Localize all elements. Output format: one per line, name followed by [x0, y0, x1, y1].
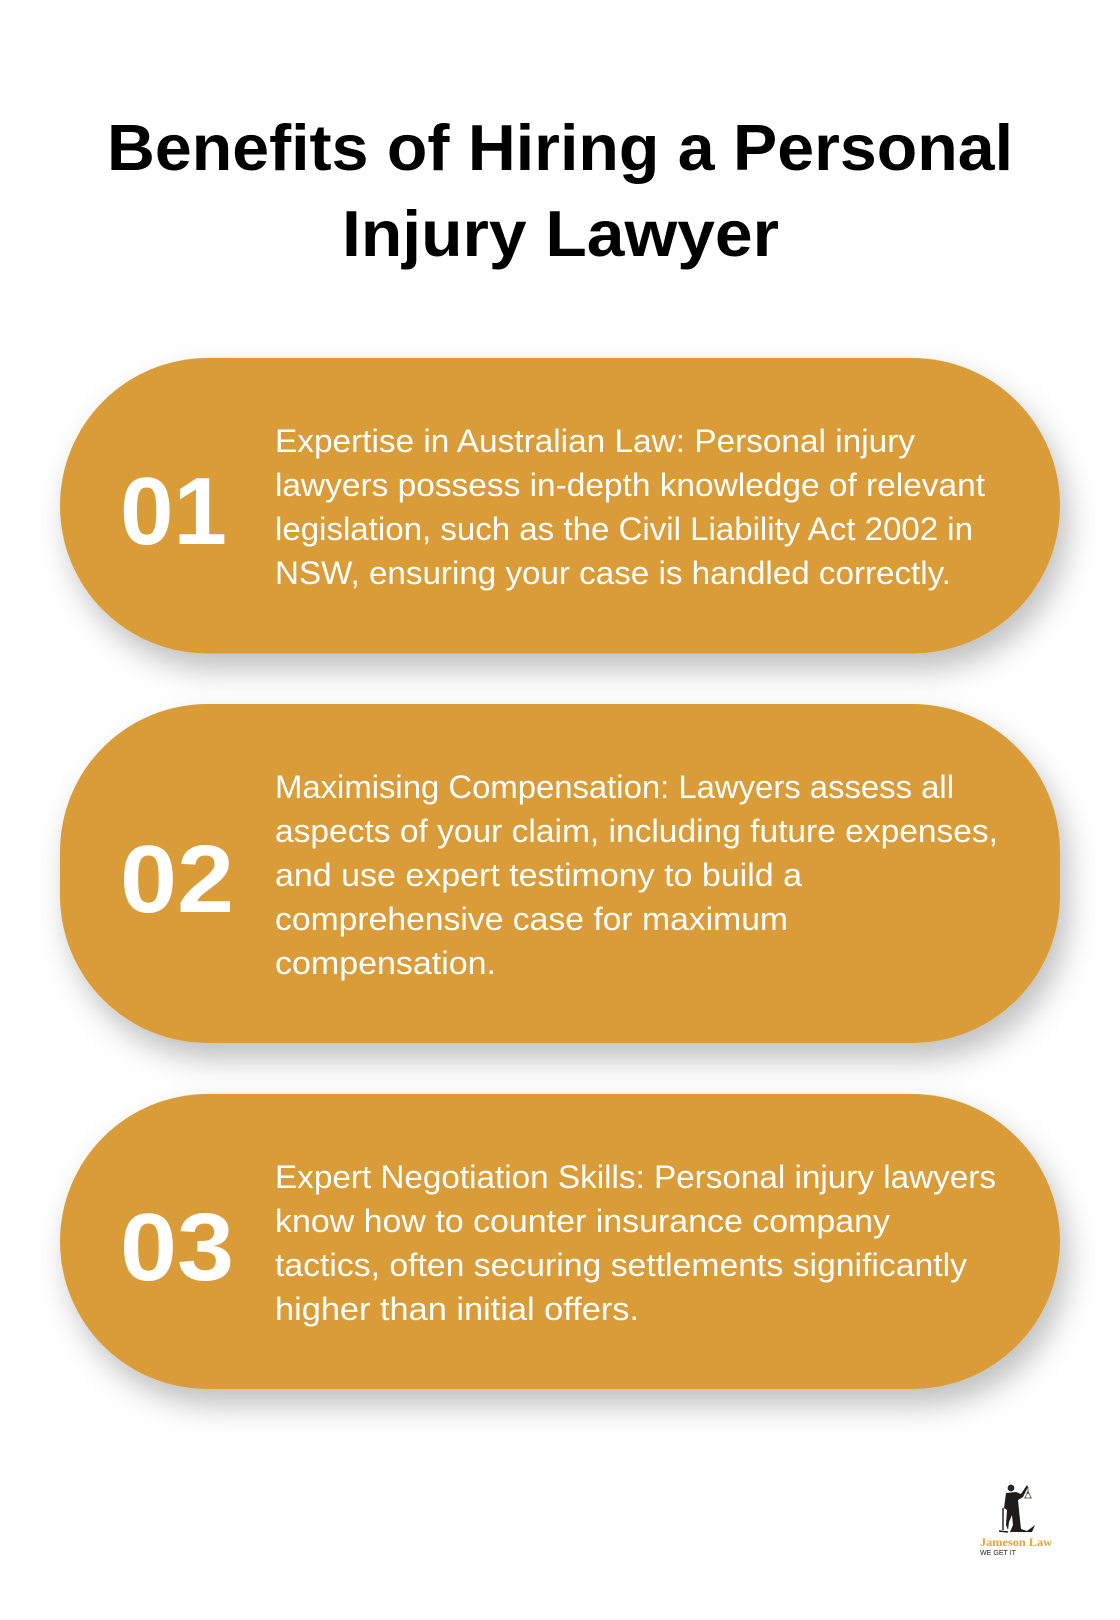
text: expert negotiation skills: Expert Negotiation Skills: Personal injury lawyers	[275, 1159, 996, 1195]
icon: lady justice figure	[999, 1485, 1035, 1532]
text: expert negotiation skills: tactics, often securing settlements significantly	[275, 1247, 968, 1283]
text: maximising compensation	[275, 769, 998, 981]
panel: benefit 01	[60, 358, 1060, 654]
panel background pill 03	[60, 1094, 1060, 1389]
text: expertise in Australian law	[275, 423, 985, 591]
text: maximising compensation: compensation.	[275, 945, 496, 981]
panel: benefit 03	[60, 1094, 1060, 1389]
text: expert negotiation skills: higher than initial offers.	[275, 1291, 639, 1327]
panel background pill 02	[60, 704, 1060, 1043]
logo name: Jameson Law	[980, 1537, 1053, 1549]
text: maximising compensation: comprehensive case for maximum	[275, 901, 788, 937]
text: expertise in Australian law: lawyers possess in-depth knowledge of relevant	[275, 467, 985, 503]
text: expertise in Australian law: Expertise in Australian Law: Personal injury	[275, 423, 916, 459]
panel background pill 01	[60, 358, 1060, 654]
text: maximising compensation: Maximising Compensation: Lawyers assess all	[275, 769, 954, 805]
text: maximising compensation: and use expert testimony to build a	[275, 857, 803, 893]
logo tagline: WE GET IT	[980, 1548, 1016, 1557]
text: maximising compensation: aspects of your claim, including future expenses,	[275, 813, 998, 849]
logo: Jameson Law	[980, 1485, 1053, 1557]
number 01: 01	[120, 458, 227, 565]
text: expert negotiation skills	[275, 1159, 996, 1327]
panel: benefit 02	[60, 704, 1060, 1043]
title: Injury Lawyer	[342, 197, 779, 270]
text: expertise in Australian law: legislation, such as the Civil Liability Act 2002 in	[275, 511, 973, 547]
title	[107, 111, 1013, 270]
text: expert negotiation skills: know how to counter insurance company	[275, 1203, 891, 1239]
number 03: 03	[120, 1194, 234, 1301]
text: expertise in Australian law: NSW, ensuring your case is handled correctly.	[275, 555, 951, 591]
number 02: 02	[120, 826, 234, 933]
title: Benefits of Hiring a Personal	[107, 111, 1013, 184]
